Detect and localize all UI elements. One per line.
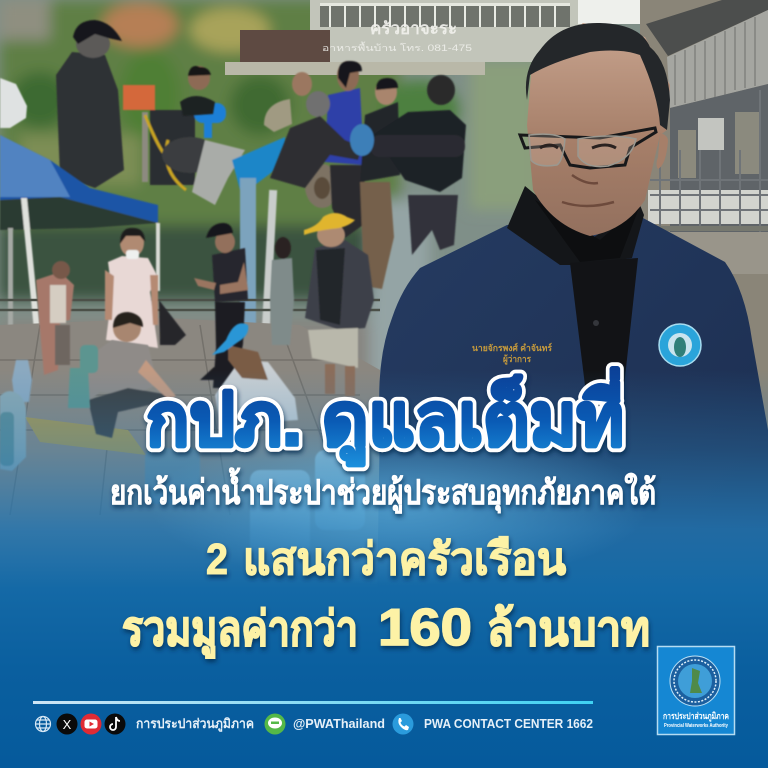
icon: YouTube [80,714,102,734]
white building with balcony: อาหารพื้นบ้าน โทร. 081-475 [322,41,472,53]
white building with balcony [225,0,590,75]
parked car [0,78,27,128]
value figure: รวมมูลค่ากว่า [122,603,358,659]
railing and pond [0,300,380,310]
blue gradient overlay [0,370,768,768]
value figure: 160 [378,599,472,657]
blue tent [0,135,160,402]
crouching man [84,312,176,438]
person bending left [36,261,74,375]
governor in jacket [376,23,768,660]
logo emblem [670,656,720,706]
right building [640,0,768,440]
woman in white dress [105,228,186,348]
households figure: แสนกว่าครัวเรือน [243,535,566,584]
title: กปภ. ดูแลเต็มที่ [146,367,624,466]
pavement [0,318,380,640]
man in straw hat [304,213,374,396]
icon: X: X [63,717,72,732]
icon: TikTok [104,714,126,734]
icon: globe [36,716,50,732]
woman in blue cap [212,323,298,425]
embroidered name: ผู้ว่าการ [503,354,531,365]
embroidered name [472,342,552,365]
man checking phone [194,223,248,388]
logo English name: Provincial Waterworks Authority [664,723,728,729]
contact centre: PWA CONTACT CENTER 1662 [424,716,593,731]
logo Thai name: การประปาส่วนภูมิภาค [663,711,729,722]
LINE handle: @PWAThailand [293,716,385,731]
value figure: ล้านบาท [487,603,650,656]
footer divider [33,701,593,704]
PWA logo box [658,646,734,734]
sky [578,0,648,24]
white building with balcony: ครัวอาจะระ [370,19,457,38]
workers around pipe [180,61,466,289]
organisation name: การประปาส่วนภูมิภาค [136,716,254,732]
households figure: 2 [206,535,228,584]
centre glow [150,425,650,585]
title: กปภ. ดูแลเต็มที่ [146,367,624,466]
jacket badge [659,324,701,366]
embroidered name: นายจักรพงศ์ คำจันทร์ [472,342,552,353]
water pump machinery [123,85,339,350]
footer contacts [36,714,593,734]
icon: X [56,714,78,734]
subtitle: ยกเว้นค่าน้ำประปาช่วยผู้ประสบอุทกภัยภาคใต้ [110,467,656,514]
value figure [122,599,650,659]
man in black jacket [56,20,124,188]
water bottles [0,345,365,560]
icon: phone [392,714,414,734]
icon: LINE [264,714,286,734]
woman in background [270,237,294,345]
